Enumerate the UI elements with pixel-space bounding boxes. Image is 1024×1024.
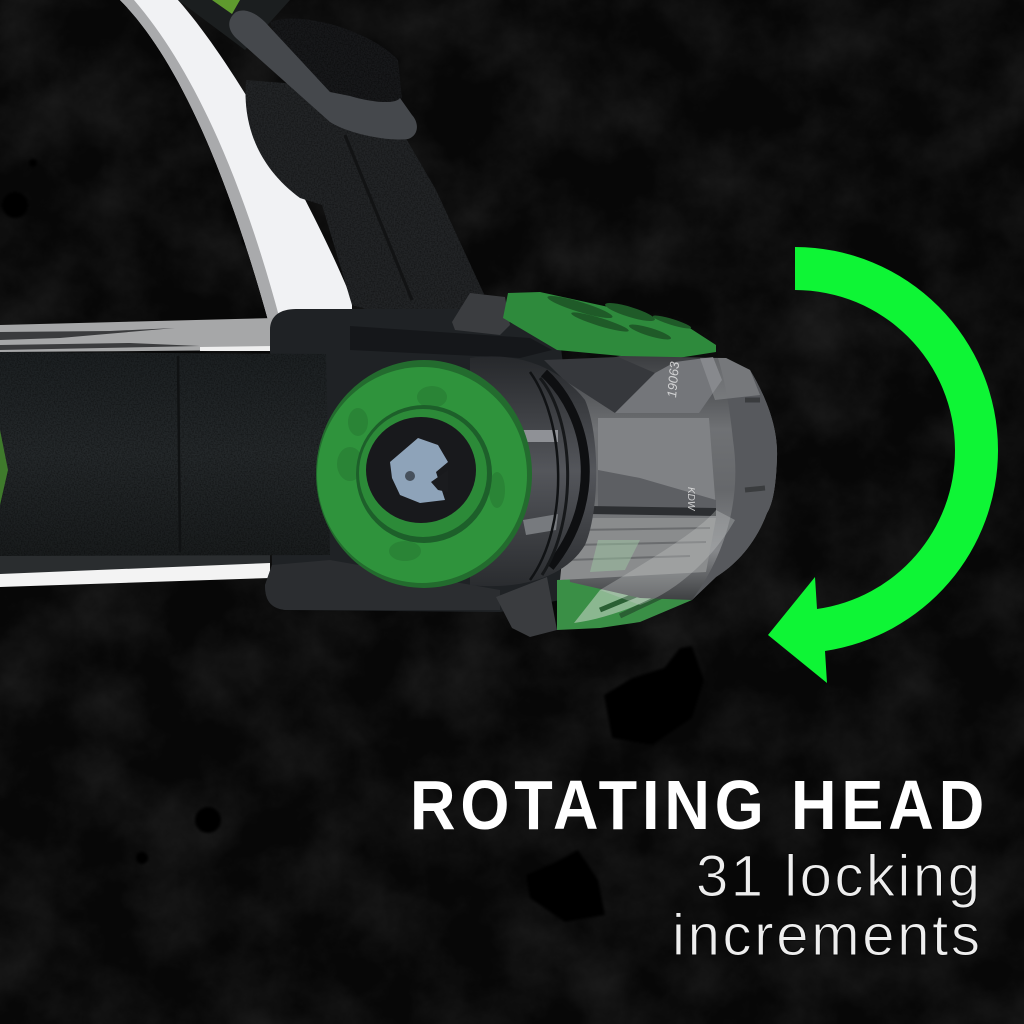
- top strap: fabric with green threads: [178, 0, 484, 328]
- subheading: 31 locking: [696, 844, 980, 909]
- headband: white rear strap: [120, 0, 352, 320]
- headband: side strap edges: [0, 318, 275, 587]
- strap pad above clip: [270, 18, 402, 105]
- buckle clip: [229, 10, 417, 140]
- front bezel: green ring: [316, 360, 532, 588]
- rotation arrow: [768, 247, 998, 683]
- bottom vent plate: [496, 573, 692, 637]
- barrel flutes and translucent ghost: [544, 357, 777, 605]
- rear barrel: [565, 356, 777, 600]
- lamp head: [316, 292, 777, 637]
- side strap: black webbing: [0, 352, 330, 556]
- lens: [366, 417, 476, 523]
- heading: ROTATING HEAD: [410, 767, 984, 845]
- neck collar: [470, 356, 596, 586]
- barrel engraved text: 19063: [664, 360, 682, 398]
- barrel engraved text: [664, 360, 696, 512]
- mounting bracket: [265, 293, 565, 612]
- barrel engraved text: KDW: [685, 487, 696, 512]
- subheading: [672, 844, 980, 968]
- subheading: increments: [672, 903, 980, 968]
- top vent plate: [503, 292, 716, 360]
